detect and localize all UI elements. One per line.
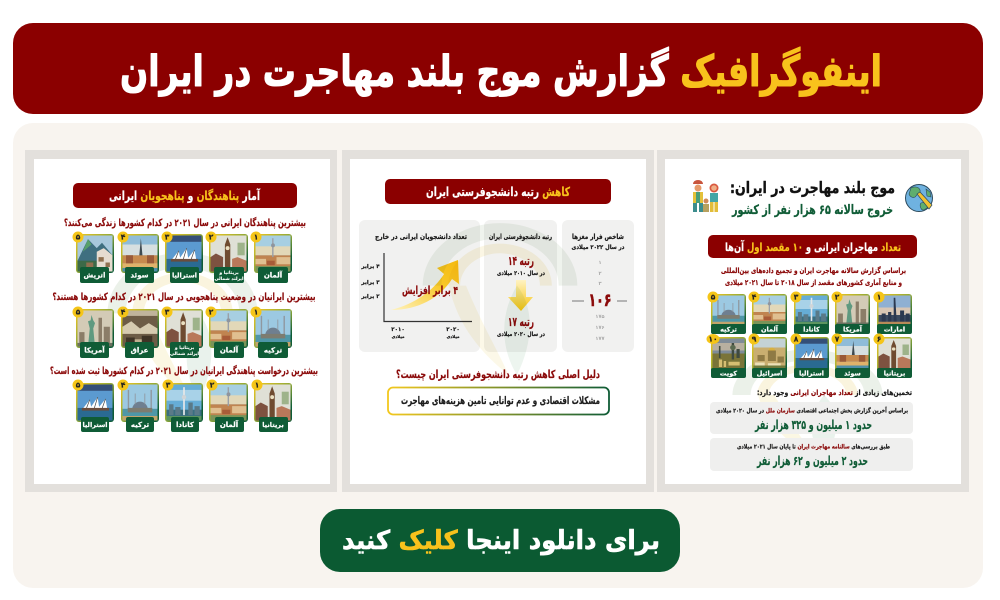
rank 14: در سال ۲۰۱۰ میلادی [497, 270, 545, 277]
y axis labels [360, 264, 380, 300]
card: USA: آمریکا [84, 346, 105, 354]
question 3: بیشترین درخواست پناهندگی ایرانیان در سال ۲۰۲۱ در کدام کشورها ثبت شده است؟ [50, 364, 318, 377]
card: USA: ۵ [76, 308, 81, 316]
card: USA: آمریکا [843, 324, 863, 334]
rank 14: رتبه ۱۴ [508, 253, 534, 268]
question 1: بیشترین پناهندگان ایرانی در سال ۲۰۲۱ در کدام کشورها زندگی می‌کنند؟ [64, 216, 306, 229]
estimate box 1: براساس آخرین گزارش بخش اجتماعی اقتصادی سازمان ملل در سال ۲۰۲۰ میلادی [716, 406, 908, 414]
card: USA [72, 306, 114, 358]
card: Turkey: ۵ [711, 292, 716, 302]
card: Germany: ۴ [752, 292, 757, 302]
chart card: students abroad: تعداد دانشجویان ایرانی در خارج [375, 233, 467, 241]
brain drain card: در سال ۲۰۲۲ میلادی [572, 244, 624, 251]
card: Britain and Northern Ireland: ایرلند شمالی [214, 277, 244, 282]
rank 17: رتبه ۱۷ [508, 314, 534, 329]
card: Sweden: ۴ [121, 232, 126, 242]
source text: براساس گزارش سالانه مهاجرت ایران و تجمیع داده‌های بین‌المللی [721, 266, 906, 275]
y axis labels: ۳ برابر [360, 280, 380, 286]
card: Austria: ۵ [76, 232, 81, 242]
rank 17 [497, 314, 545, 338]
card: Turkey [250, 306, 292, 358]
card: Canada [162, 380, 203, 432]
card: Turkey: ۱ [254, 308, 258, 316]
header banner [13, 23, 983, 114]
rank list [595, 260, 605, 342]
card: Britain: بریتانیا [884, 370, 905, 378]
download button: برای دانلود اینجا کلیک کنید [342, 526, 660, 556]
card: Sweden: سوئد [844, 370, 861, 378]
rank list: ۲ [598, 271, 602, 277]
answer box: مشکلات اقتصادی و عدم توانایی تامین هزینه‌های مهاجرت [401, 395, 600, 407]
card: Israel: اسرائیل [757, 370, 782, 378]
card: Israel: ۹ [752, 334, 757, 344]
card: Sweden [118, 232, 159, 283]
card: Canada: ۳ [794, 292, 799, 302]
source text: و منابع آماری کشورهای مقصد از سال ۲۰۱۸ تا سال ۲۰۲۱ میلادی [725, 277, 902, 287]
download button [320, 509, 680, 572]
answer box [388, 388, 609, 414]
card: Turkey [708, 292, 746, 334]
source text [721, 266, 906, 287]
card: Australia: ۳ [165, 232, 170, 242]
card: Canada: ۳ [166, 380, 171, 390]
card: Britain and Northern Ireland [162, 306, 203, 358]
panel: migration wave [657, 150, 969, 492]
rank list: ۱۷۵ [595, 314, 605, 320]
rank card [484, 220, 557, 352]
x axis labels [391, 327, 460, 339]
card: Britain: ۶ [877, 334, 881, 344]
card: Kuwait: ۱۰ [708, 334, 718, 344]
heading bar: destinations: تعداد مهاجران ایرانی و ۱۰ مقصد اول آن‌ها [725, 240, 901, 255]
down arrow [508, 280, 533, 311]
card: Iraq [118, 306, 159, 358]
card: Israel [748, 334, 787, 378]
card: Australia [72, 380, 114, 432]
card: Sweden: سوئد [131, 272, 149, 280]
card: UAE: امارات [884, 326, 905, 334]
estimate box 2: طبق بررسی‌های سالنامه مهاجرت ایران تا پایان سال ۲۰۲۱ میلادی [737, 444, 890, 450]
panel: student ranking decline [342, 150, 654, 492]
card: Australia: ۸ [794, 334, 799, 344]
heading bar: student ranking: کاهش رتبه دانشجوفرستی ایران [426, 184, 571, 199]
brain drain card: شاخص فرار مغزها [572, 233, 624, 241]
rank 14 [497, 253, 545, 277]
card: Britain and Northern Ireland: ۳ [165, 308, 170, 316]
estimates intro: تخمین‌های زیادی از تعداد مهاجران ایرانی وجود دارد: [757, 388, 912, 397]
card: Australia: استرالیا [82, 421, 108, 429]
card: Iraq: ۴ [121, 308, 126, 316]
card row 3 [72, 380, 292, 432]
x axis labels: ۲۰۲۰ [446, 327, 460, 333]
card: Germany: آلمان [761, 324, 779, 334]
card: Britain and Northern Ireland [206, 232, 248, 283]
card: Germany: ۲ [210, 380, 215, 390]
heading bar: student ranking [385, 179, 611, 204]
card: Kuwait: کویت [720, 370, 737, 378]
question: main reason: دلیل اصلی کاهش رتبه دانشجوفرستی ایران چیست؟ [396, 368, 600, 381]
rank list: ۱ [598, 260, 602, 266]
card: Turkey: ترکیه [264, 346, 282, 354]
card: Australia: ۵ [76, 380, 81, 390]
card: Germany [748, 292, 787, 334]
card: Germany: ۱ [254, 232, 258, 242]
content background panel [13, 123, 983, 588]
chart card: students abroad [359, 220, 480, 352]
heading bar: destinations [708, 235, 917, 258]
card: Canada: کانادا [176, 421, 195, 429]
card: Britain [874, 334, 912, 378]
card: Australia [790, 334, 829, 378]
subtitle: خروج سالانه ۶۵ هزار نفر از کشور [731, 203, 893, 218]
card: Britain: ۱ [255, 380, 259, 390]
card row 2 [72, 306, 292, 358]
rank card: رتبه دانشجوفرستی ایران [489, 233, 552, 241]
watermark [432, 231, 568, 375]
card: UAE [874, 292, 912, 334]
x axis labels: میلادی [447, 334, 460, 339]
brain drain card [562, 220, 634, 352]
title: اینفوگرافیک گزارش موج بلند مهاجرت در ایران [120, 46, 882, 97]
x axis labels: ۲۰۱۰ [391, 327, 405, 333]
card: Britain and Northern Ireland: بریتانیا و [218, 271, 239, 276]
x axis labels: میلادی [392, 334, 405, 339]
axes [384, 253, 472, 322]
card: Iraq: عراق [131, 346, 149, 354]
rank list: ۱۷۶ [595, 325, 605, 331]
card row 1 [72, 232, 292, 283]
card: Sweden [832, 334, 870, 378]
card: Germany [206, 380, 248, 432]
card: Germany: ۲ [209, 308, 214, 316]
growth arrow [391, 260, 459, 310]
card: Australia: استرالیا [799, 370, 824, 378]
card: Germany: آلمان [264, 270, 283, 280]
card: USA: ۲ [835, 292, 840, 302]
card: Austria [72, 232, 114, 283]
y axis labels: ۴ برابر [360, 264, 380, 270]
estimate box 1 [710, 402, 913, 434]
card: Canada [790, 292, 829, 334]
main title: موج بلند مهاجرت در ایران: [730, 179, 895, 197]
card: Germany: آلمان [220, 346, 239, 354]
card: Britain [252, 380, 292, 432]
panel: asylum seekers statistics [25, 150, 337, 492]
card: Austria: اتریش [84, 272, 105, 280]
rank list: ۱۷۷ [595, 336, 605, 342]
question 2: بیشترین ایرانیان در وضعیت پناهجویی در سال ۲۰۲۱ در کدام کشورها هستند؟ [52, 292, 315, 303]
card: Australia [162, 232, 203, 283]
card: UAE: ۱ [877, 292, 881, 302]
destination row 1 [708, 292, 912, 334]
card: Australia: استرالیا [172, 272, 197, 280]
heading bar: refugees [73, 183, 297, 208]
card: Britain and Northern Ireland: ایرلند شمالی [170, 352, 200, 357]
card: Turkey: ۴ [121, 380, 126, 390]
card: Britain and Northern Ireland: بریتانیا و [174, 346, 194, 351]
card: USA [832, 292, 870, 334]
estimate box 1: حدود ۱ میلیون و ۳۲۵ هزار نفر [754, 417, 872, 432]
card: Turkey: ترکیه [131, 421, 149, 429]
estimate box 2 [710, 438, 913, 471]
estimate box 2: حدود ۲ میلیون و ۶۲ هزار نفر [756, 453, 868, 468]
heading bar: refugees: آمار پناهندگان و پناهجویان ایرانی [109, 188, 261, 203]
card: Kuwait [706, 334, 746, 378]
card: Turkey: ترکیه [720, 326, 737, 334]
card: Turkey [118, 380, 159, 432]
card: Germany [206, 306, 248, 358]
rank list: ۳ [598, 281, 602, 287]
icon: globe [906, 184, 932, 212]
card: Germany: آلمان [220, 420, 239, 429]
card: Canada: کانادا [803, 326, 820, 334]
card: Sweden: ۷ [835, 334, 840, 344]
card: Germany [250, 232, 292, 283]
card: Britain: بریتانیا [262, 421, 284, 429]
brain drain value: ۱۰۶ [588, 290, 612, 311]
destination row 2 [706, 334, 912, 378]
growth label: ۴ برابر افزایش [402, 284, 458, 297]
y axis labels: ۲ برابر [360, 294, 380, 300]
rank 17: در سال ۲۰۲۰ میلادی [497, 331, 545, 338]
icon: family [693, 180, 718, 212]
card: Britain and Northern Ireland: ۲ [209, 232, 214, 242]
